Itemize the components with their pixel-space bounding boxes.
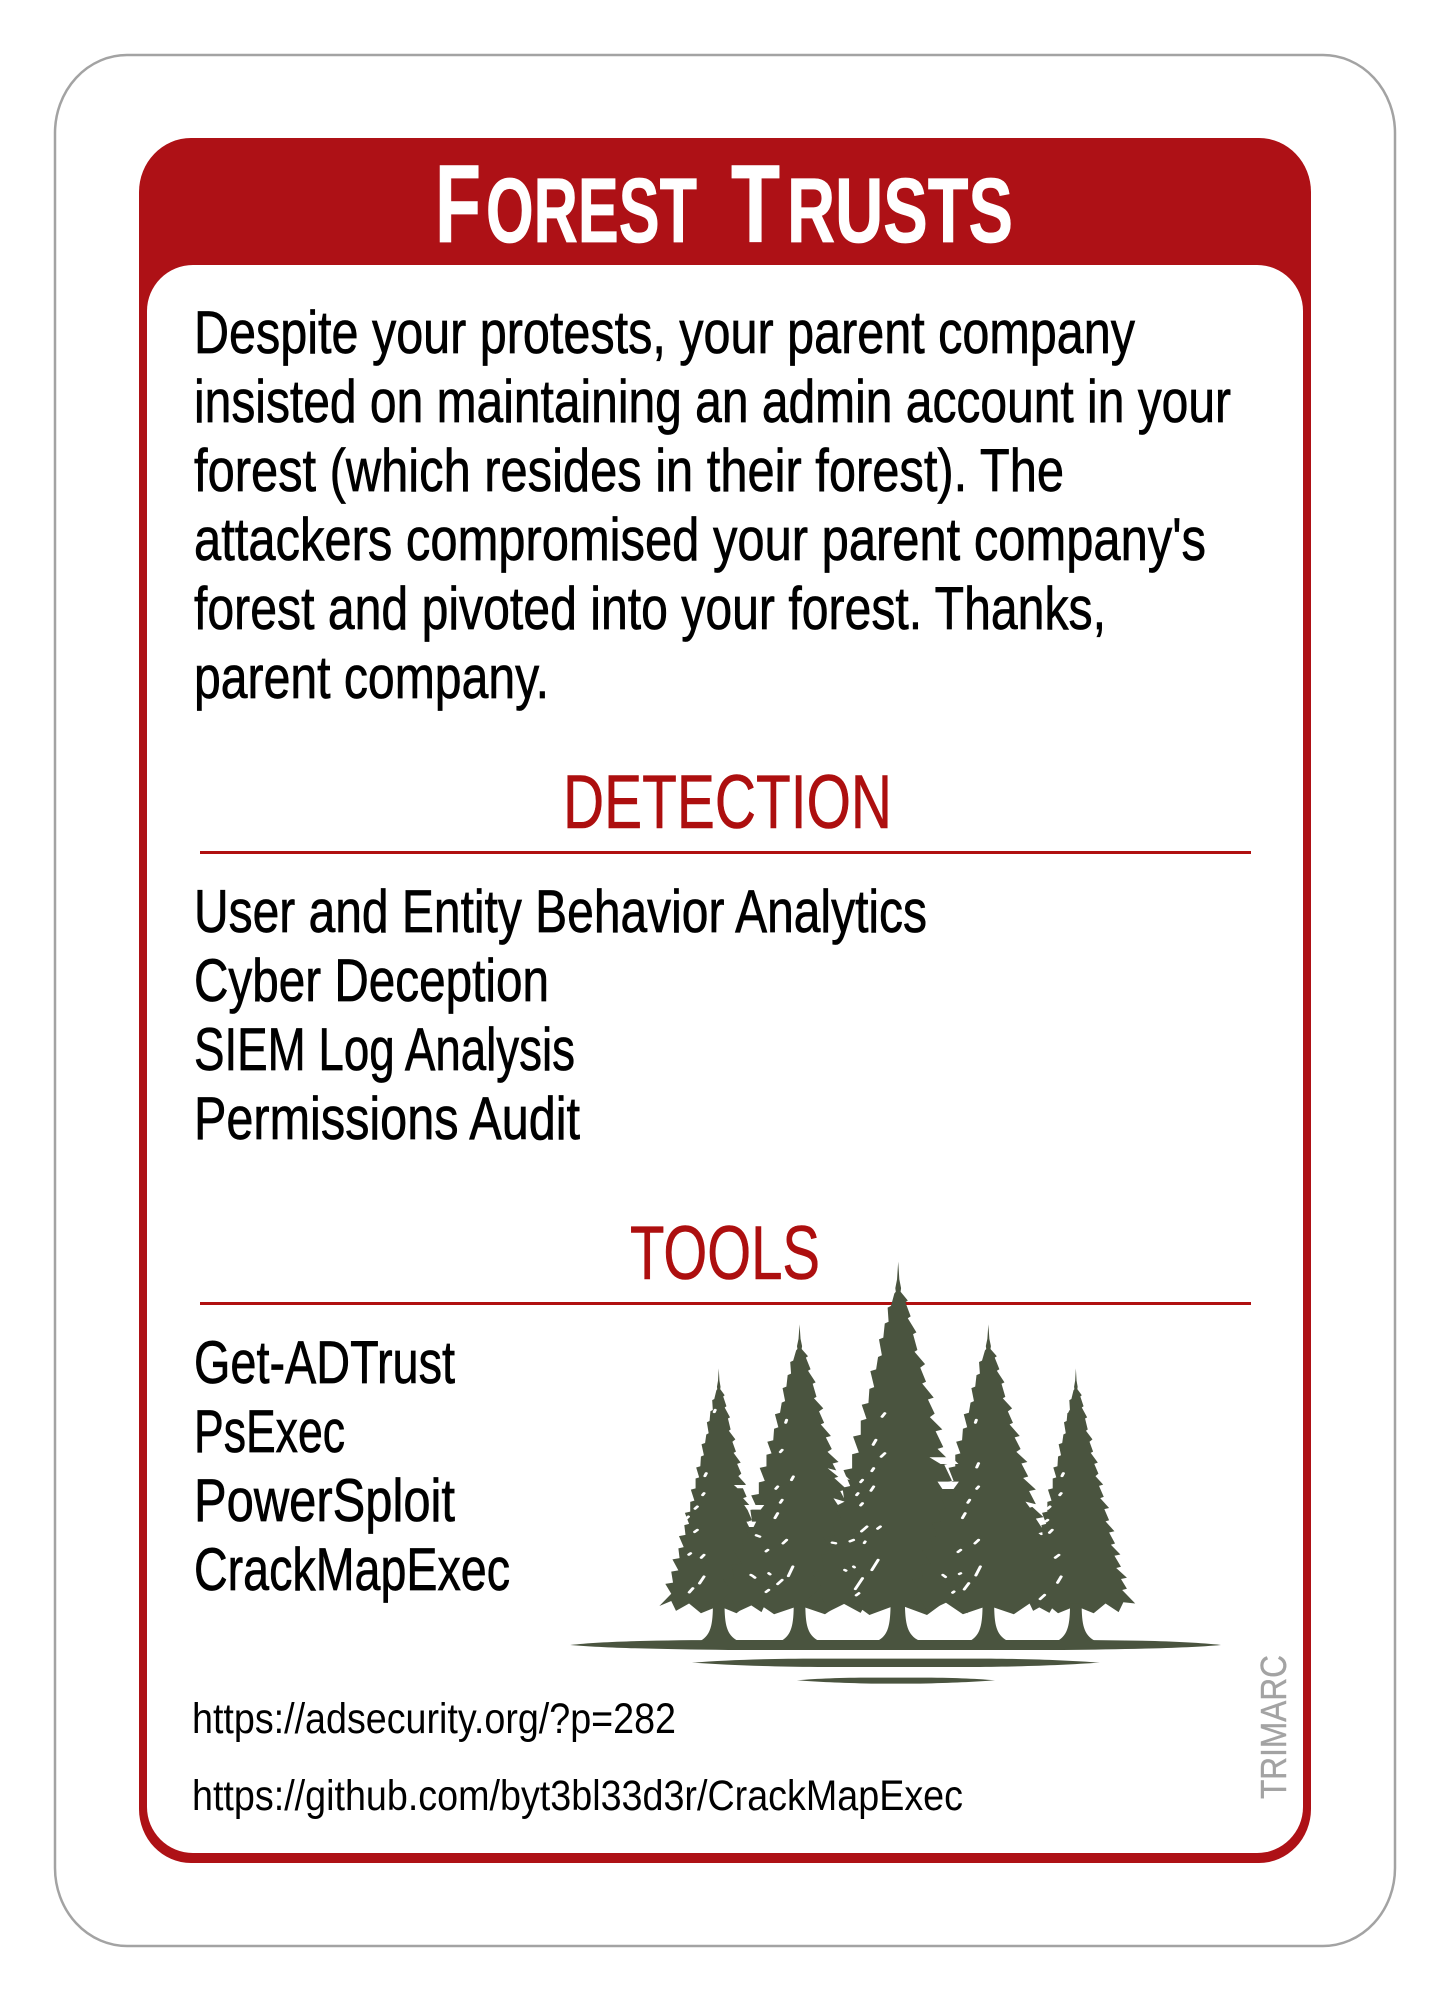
tools list: PsExec bbox=[194, 1398, 345, 1465]
scenario text: attackers compromised your parent company's bbox=[194, 506, 1206, 573]
detection list: User and Entity Behavior Analytics bbox=[194, 878, 927, 945]
title: RUSTS bbox=[787, 160, 1013, 262]
tools list: CrackMapExec bbox=[194, 1536, 510, 1603]
detection list bbox=[194, 878, 927, 1152]
tools heading: TOOLS bbox=[630, 1211, 820, 1296]
scenario text: forest and pivoted into your forest. Thanks, bbox=[194, 575, 1106, 642]
red card frame bbox=[139, 138, 1311, 1863]
vertical TRIMARC credit: TRIMARC bbox=[1253, 1655, 1294, 1799]
white content panel bbox=[147, 265, 1303, 1853]
detection rule bbox=[200, 851, 1251, 854]
detection list: Cyber Deception bbox=[194, 947, 549, 1014]
scenario text: forest (which resides in their forest). The bbox=[194, 437, 1064, 504]
tools list: Get-ADTrust bbox=[194, 1329, 455, 1396]
title: T bbox=[731, 143, 780, 266]
detection list: Permissions Audit bbox=[194, 1085, 580, 1152]
detection heading: DETECTION bbox=[563, 760, 892, 845]
scenario text bbox=[194, 299, 1231, 711]
reference link 2: https://github.com/byt3bl33d3r/CrackMapExec bbox=[192, 1772, 963, 1820]
detection list: SIEM Log Analysis bbox=[194, 1016, 575, 1083]
tools list: PowerSploit bbox=[194, 1467, 455, 1534]
title: OREST bbox=[486, 160, 714, 262]
title: F bbox=[435, 143, 481, 266]
reference link 1: https://adsecurity.org/?p=282 bbox=[192, 1695, 676, 1743]
tools list bbox=[194, 1329, 510, 1603]
scenario text: parent company. bbox=[194, 644, 549, 711]
scenario text: Despite your protests, your parent company bbox=[194, 299, 1135, 366]
icon: forest of five pine trees bbox=[570, 1262, 1221, 1684]
tools rule bbox=[200, 1302, 1251, 1305]
